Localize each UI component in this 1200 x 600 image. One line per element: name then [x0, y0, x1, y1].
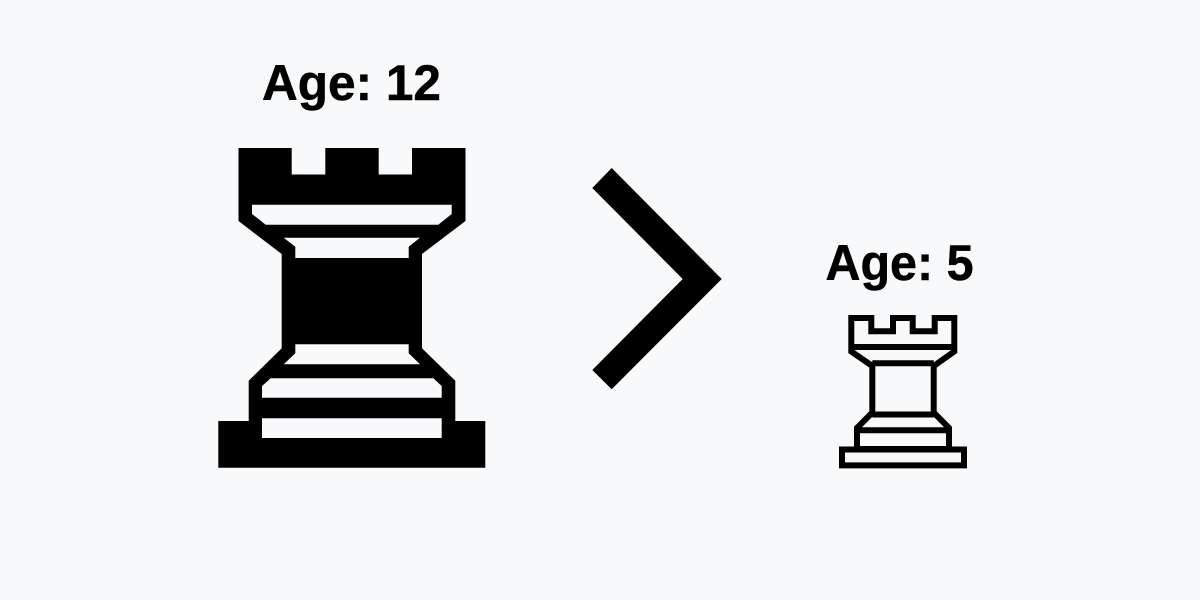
- arrow: greater-than symbol: [592, 168, 722, 389]
- icon: small outlined rook: [842, 318, 964, 465]
- icon: large solid rook: [218, 148, 485, 468]
- label: Age 12: Age: 12: [262, 55, 441, 111]
- label: Age 5: Age: 5: [826, 235, 974, 291]
